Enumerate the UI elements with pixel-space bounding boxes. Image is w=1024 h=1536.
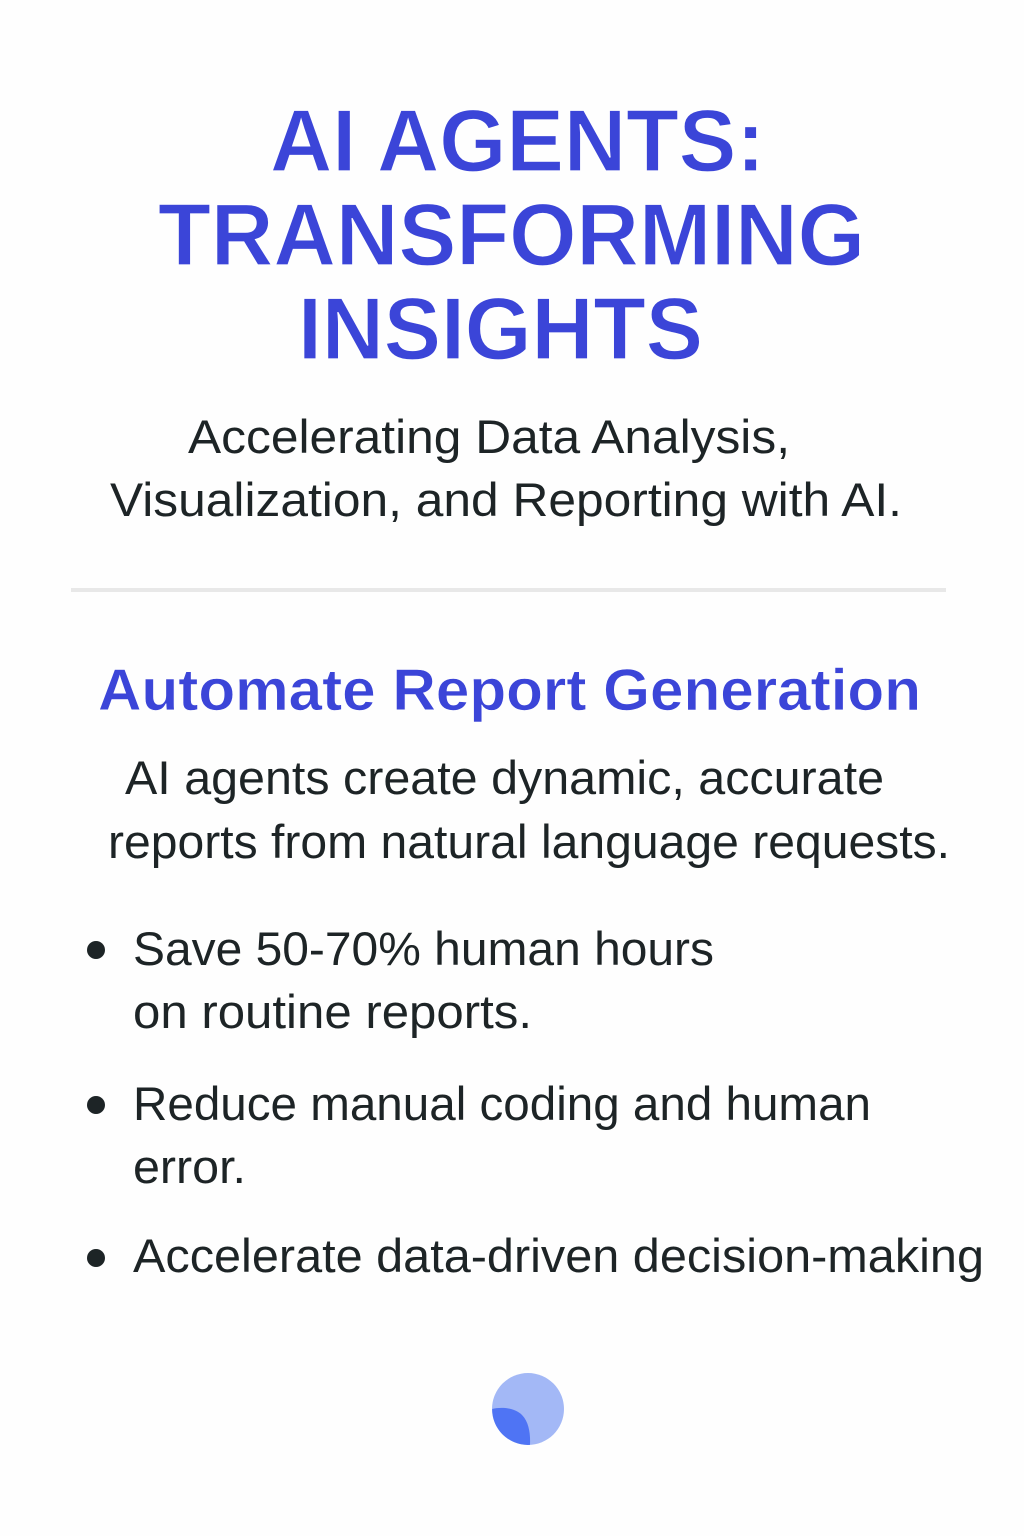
title: AI AGENTS: xyxy=(270,91,765,190)
bullet: save hours xyxy=(87,922,714,1038)
title: INSIGHTS xyxy=(298,279,703,378)
subtitle: Visualization, and Reporting with AI. xyxy=(110,473,902,526)
bullet: reduce errors xyxy=(87,1077,871,1193)
bullet: save hours: Save 50-70% human hours xyxy=(133,922,714,975)
section heading: Automate Report Generation xyxy=(98,658,921,723)
title: TRANSFORMING xyxy=(158,185,865,284)
section description: AI agents create dynamic, accurate xyxy=(125,751,884,804)
icon: blue circle xyxy=(492,1373,564,1445)
title xyxy=(158,91,865,378)
bullet: reduce errors: error. xyxy=(133,1140,246,1193)
subtitle: Accelerating Data Analysis, xyxy=(188,410,790,463)
subtitle xyxy=(110,410,902,526)
section description: reports from natural language requests. xyxy=(108,815,950,868)
bullet: accelerate decisions: Accelerate data-driven decision-making xyxy=(133,1229,984,1282)
bullet: reduce errors: Reduce manual coding and human xyxy=(133,1077,871,1130)
bullet list xyxy=(87,922,984,1282)
bullet: save hours: on routine reports. xyxy=(133,985,532,1038)
section description xyxy=(108,751,950,868)
